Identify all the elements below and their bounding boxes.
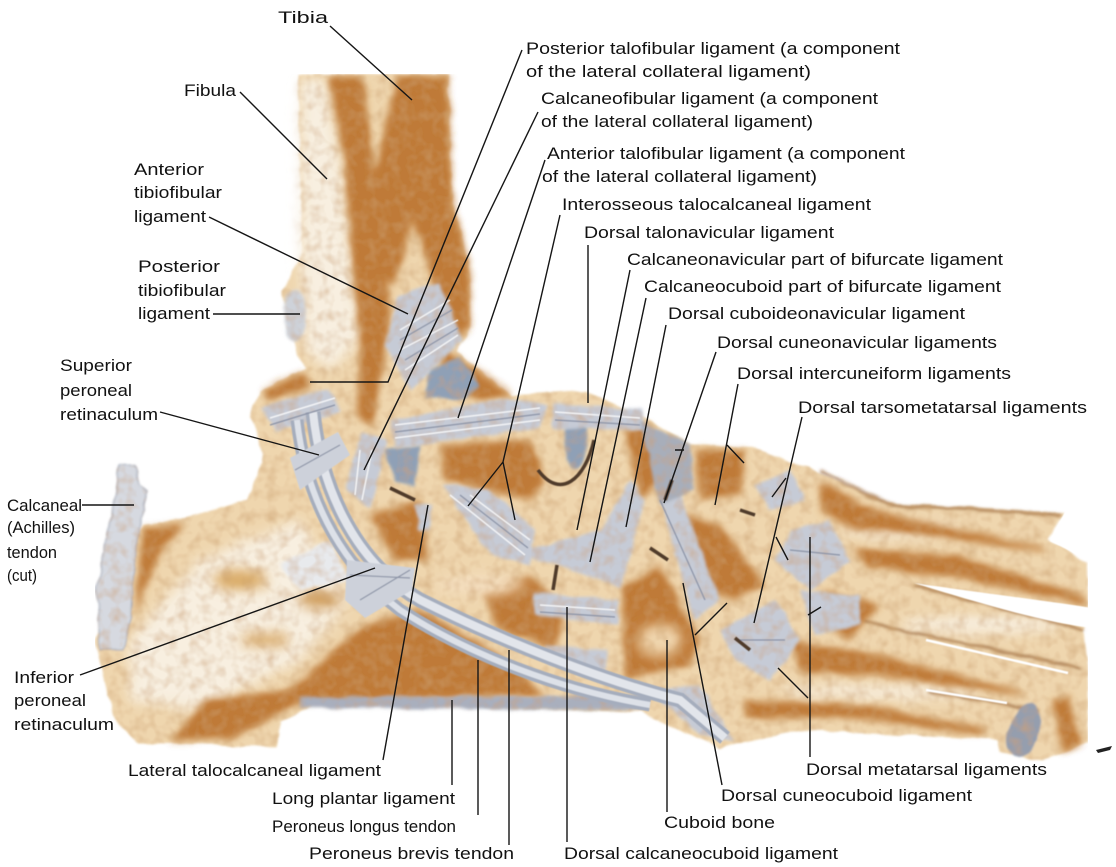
- label: Superior peroneal retinaculum: [60, 356, 319, 455]
- label: Inferior peroneal retinaculum: retinaculum: [14, 715, 114, 734]
- label: Calcaneal (Achilles) tendon (cut): (cut): [7, 566, 37, 585]
- peroneus longus highlight: [297, 420, 650, 705]
- label: Dorsal cuneocuboid ligament: [683, 583, 972, 805]
- label: Posterior tibiofibular ligament: tibiofibular: [138, 281, 226, 300]
- label: Dorsal calcaneocuboid ligament: Dorsal calcaneocuboid ligament: [564, 844, 838, 863]
- label: Posterior tibiofibular ligament: ligament: [138, 304, 210, 323]
- label: Superior peroneal retinaculum: retinaculum: [60, 405, 158, 424]
- label: Calcaneal (Achilles) tendon (cut): [7, 496, 134, 585]
- label: Posterior tibiofibular ligament: [138, 257, 300, 323]
- label: Anterior tibiofibular ligament: Anterior: [134, 160, 204, 179]
- illustration: lateral foot and ankle: [95, 74, 1096, 761]
- label: Dorsal metatarsal ligaments: [778, 537, 1047, 779]
- foot and leg silhouette: [95, 74, 1088, 760]
- gaps between metatarsals: [914, 490, 1096, 703]
- retinacula and fibres over tendons: [270, 300, 840, 650]
- label: Tibia: Tibia: [278, 8, 329, 27]
- label: Calcaneocuboid part of bifurcate ligament: Calcaneocuboid part of bifurcate ligament: [644, 277, 1001, 296]
- label: Interosseous talocalcaneal ligament: Interosseous talocalcaneal ligament: [562, 195, 871, 214]
- label: Calcaneonavicular part of bifurcate ligament: Calcaneonavicular part of bifurcate ligament: [627, 250, 1003, 269]
- textured bones and ligaments: [95, 74, 1088, 761]
- label: Calcaneofibular ligament: of the lateral collateral ligament): [541, 112, 813, 131]
- label: Peroneus brevis tendon: Peroneus brevis tendon: [309, 844, 514, 863]
- label: Dorsal cuboideonavicular ligament: Dorsal cuboideonavicular ligament: [668, 304, 965, 323]
- ligament bands: [262, 282, 860, 742]
- label: Inferior peroneal retinaculum: Inferior: [14, 668, 74, 687]
- inferior peroneal retinaculum band: [345, 560, 415, 618]
- label: Fibula: [184, 81, 327, 179]
- label: Fibula: Fibula: [184, 81, 237, 100]
- cartilage surfaces: [284, 290, 588, 485]
- ligament fibre streaks: [270, 300, 640, 610]
- label: Dorsal cuneocuboid ligament: Dorsal cuneocuboid ligament: [721, 786, 972, 805]
- label: Dorsal cuneonavicular ligaments: Dorsal cuneonavicular ligaments: [717, 333, 997, 352]
- peroneus longus tendon: [297, 420, 650, 705]
- icon: first metatarsal head cartilage: [1001, 699, 1047, 761]
- label: Dorsal cuboideonavicular ligament: [626, 304, 965, 527]
- label: Dorsal metatarsal ligaments: Dorsal metatarsal ligaments: [806, 760, 1047, 779]
- label: Inferior peroneal retinaculum: peroneal: [14, 691, 86, 710]
- label: Anterior tibiofibular ligament: [134, 160, 408, 314]
- label: Posterior talofibular ligament: of the lateral collateral ligament): [526, 62, 811, 81]
- label: Dorsal tarsometatarsal ligaments: Dorsal tarsometatarsal ligaments: [798, 398, 1087, 417]
- label: Anterior talofibular ligament: of the lateral collateral ligament): [542, 167, 817, 186]
- calcaneal (Achilles) tendon stump: [97, 464, 148, 650]
- superior retinaculum band over tendons: [290, 432, 350, 490]
- label: Superior peroneal retinaculum: Superior: [60, 356, 132, 375]
- label: Lateral talocalcaneal ligament: Lateral talocalcaneal ligament: [128, 761, 381, 780]
- label: Calcaneal (Achilles) tendon (cut): tendon: [7, 543, 57, 562]
- thin dark bone contours: [820, 470, 1084, 710]
- label: Peroneus longus tendon: Peroneus longus tendon: [272, 817, 456, 836]
- grey fibre shadows: [270, 310, 840, 640]
- label: Anterior tibiofibular ligament: ligament: [134, 207, 206, 226]
- label: Calcaneocuboid part of bifurcate ligament: [590, 277, 1001, 562]
- label: Dorsal intercuneiform ligaments: Dorsal intercuneiform ligaments: [737, 364, 1011, 383]
- label: Calcaneofibular ligament: Calcaneofibular ligament (a component: [541, 89, 878, 108]
- label: Interosseous talocalcaneal ligament: [468, 195, 871, 520]
- label: Dorsal talonavicular ligament: Dorsal talonavicular ligament: [584, 223, 834, 242]
- label: Dorsal intercuneiform ligaments: [715, 364, 1011, 505]
- label: Posterior tibiofibular ligament: Posterior: [138, 257, 220, 276]
- mottling on heel: [212, 570, 682, 656]
- label: Anterior tibiofibular ligament: tibiofibular: [134, 183, 222, 202]
- label: Anterior talofibular ligament: [458, 144, 905, 418]
- pale fibula and heel highlights: [130, 80, 1060, 710]
- peroneus brevis highlight: [313, 412, 725, 738]
- peroneal tendons: [297, 412, 725, 738]
- label: Inferior peroneal retinaculum: [14, 568, 375, 734]
- label: Anterior talofibular ligament: Anterior talofibular ligament (a component: [547, 144, 905, 163]
- stray arrow mark: [1096, 746, 1112, 753]
- label: Superior peroneal retinaculum: peroneal: [60, 381, 132, 400]
- label: Long plantar ligament: Long plantar ligament: [272, 789, 455, 808]
- label: Posterior talofibular ligament: Posterior talofibular ligament (a component: [526, 39, 900, 58]
- long plantar ligament: [300, 696, 640, 710]
- label: Calcaneonavicular part of bifurcate ligament: [577, 250, 1003, 530]
- label: Dorsal tarsometatarsal ligaments: [754, 398, 1087, 623]
- dark joint details: [390, 440, 755, 650]
- label: Cuboid bone: Cuboid bone: [664, 813, 775, 832]
- label: Lateral talocalcaneal ligament: [128, 505, 428, 780]
- label: Calcaneal (Achilles) tendon (cut): Calcaneal: [7, 496, 82, 515]
- orange bone shading: [135, 76, 1085, 752]
- label: Calcaneofibular ligament: [364, 89, 878, 470]
- label: Dorsal cuneonavicular ligaments: [664, 333, 997, 503]
- label: Calcaneal (Achilles) tendon (cut): (Achilles): [7, 518, 75, 537]
- peroneus brevis tendon: [313, 412, 725, 738]
- label: Posterior talofibular ligament: [310, 39, 900, 382]
- label: Tibia: [278, 8, 412, 100]
